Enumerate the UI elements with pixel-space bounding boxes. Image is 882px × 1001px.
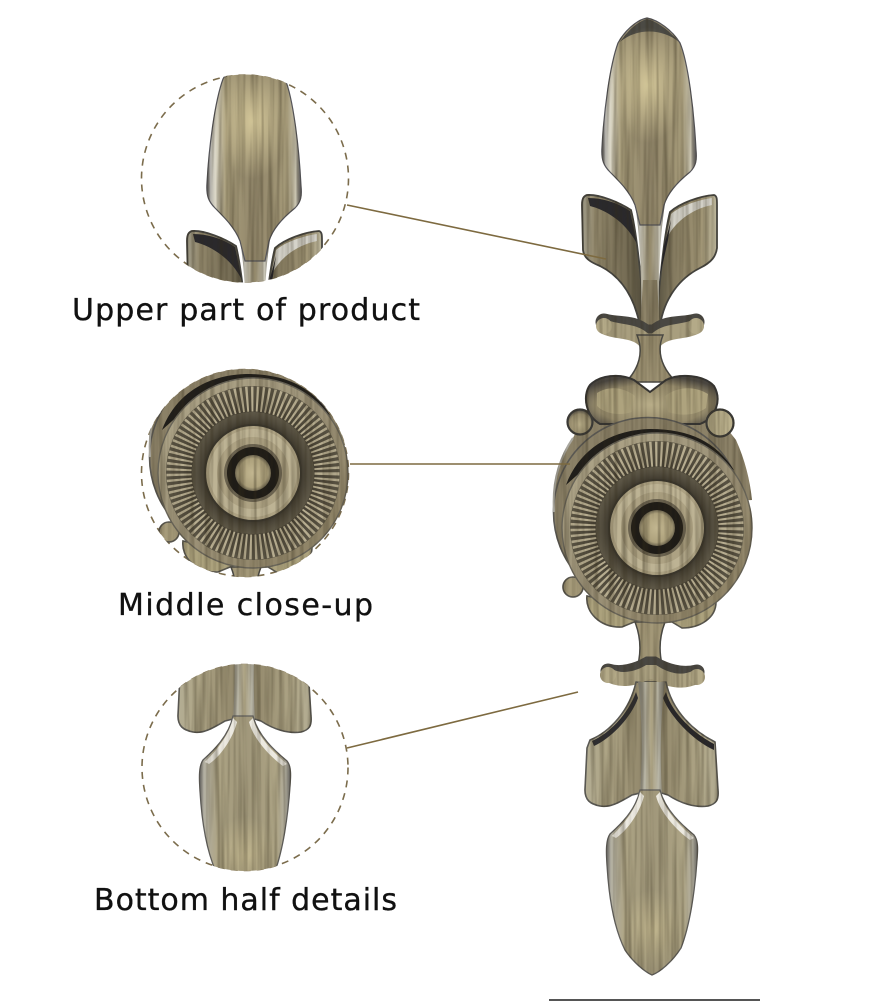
bottom rule xyxy=(549,999,760,1001)
side balls xyxy=(568,410,592,434)
inset: upper part close-up xyxy=(140,74,350,283)
product: full handle xyxy=(554,18,752,975)
lower stem xyxy=(638,682,665,795)
label: bottom half: Bottom half details xyxy=(94,883,397,918)
lower spear xyxy=(606,790,698,975)
upper stem xyxy=(634,198,666,330)
upper arms xyxy=(596,318,704,341)
leader line: upper part xyxy=(347,205,606,259)
label: upper part: Upper part of product xyxy=(72,293,420,328)
lower leaves xyxy=(585,682,718,806)
label: middle: Middle close-up xyxy=(118,588,373,623)
upper spear xyxy=(602,18,696,225)
inset: bottom half close-up xyxy=(141,664,349,872)
lower lobes xyxy=(587,596,716,628)
upper leaves xyxy=(582,195,717,326)
back plate xyxy=(554,418,742,606)
neck and lobes xyxy=(626,335,676,382)
back plate shoulders xyxy=(554,412,752,510)
leader line: middle xyxy=(350,463,570,465)
inset: middle close-up xyxy=(140,368,350,578)
lower neck and arms xyxy=(632,622,668,682)
leader line: bottom half xyxy=(347,692,578,748)
disc xyxy=(562,433,752,623)
